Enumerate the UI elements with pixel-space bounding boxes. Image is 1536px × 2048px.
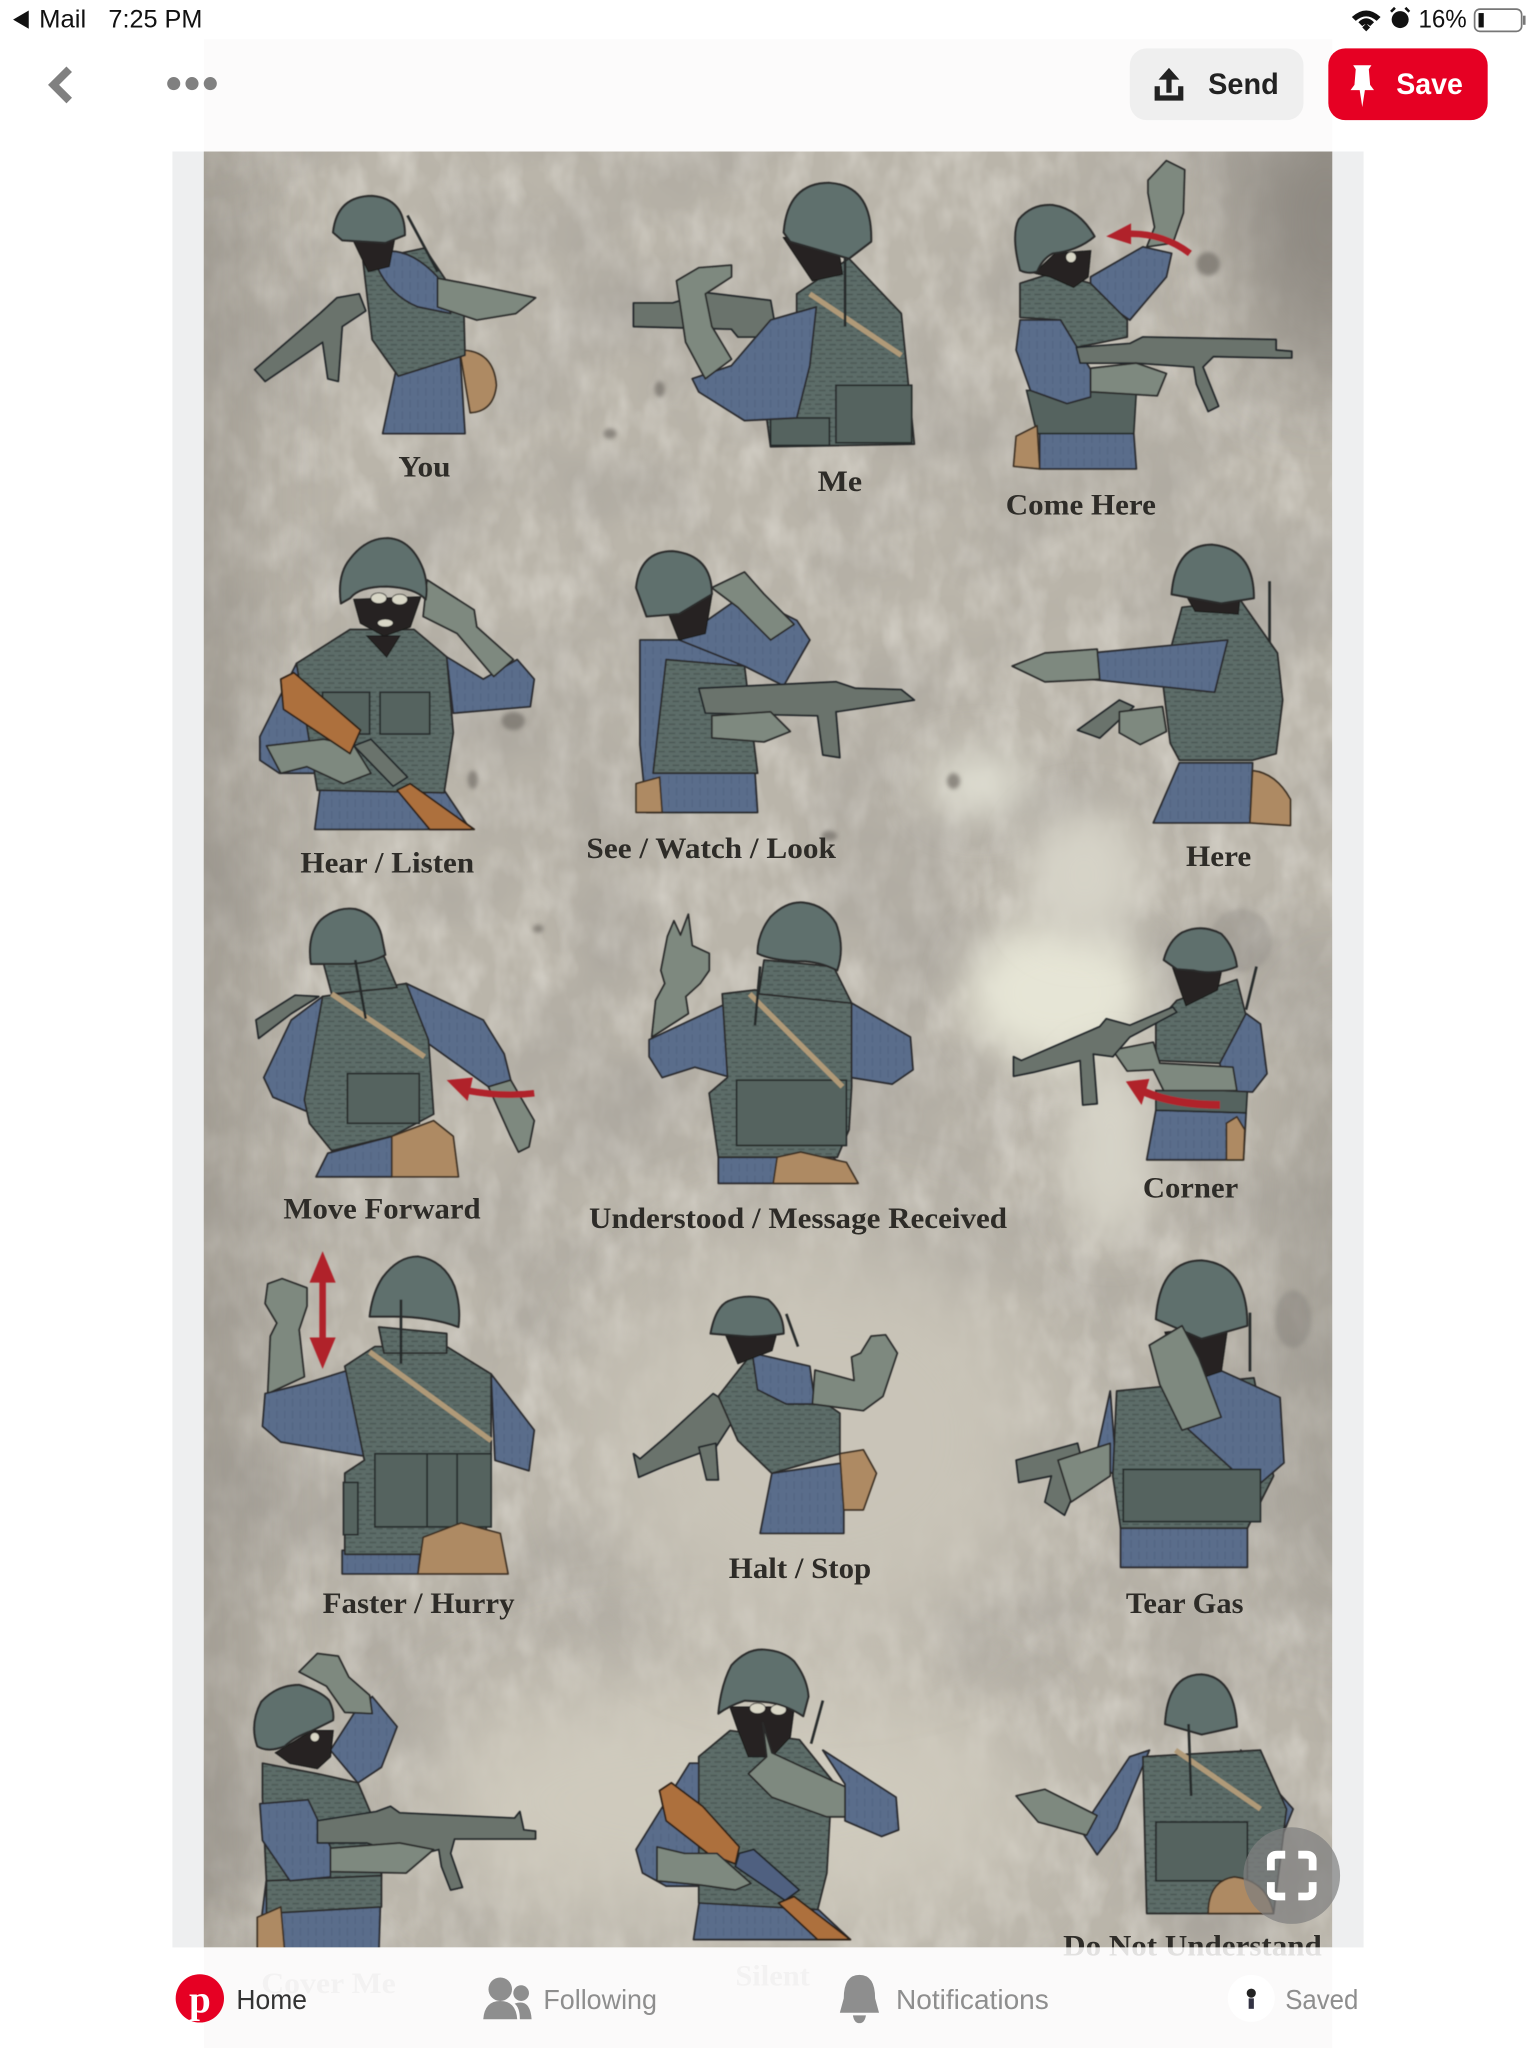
caption: Corner: Corner xyxy=(1143,1172,1238,1205)
caption: Move Forward: Move Forward xyxy=(283,1193,481,1226)
bottom bar overlay tint xyxy=(204,1947,1332,2048)
icon: share xyxy=(1155,68,1183,101)
arrow: red double vertical xyxy=(310,1251,336,1369)
caption: Come Here: Come Here xyxy=(1006,489,1156,522)
figure: Come Here xyxy=(1014,161,1292,469)
arrow: red curved xyxy=(1106,223,1190,253)
icon: back chevron xyxy=(54,69,69,101)
nav item: saved xyxy=(1228,1975,1358,2022)
caption: Halt / Stop: Halt / Stop xyxy=(729,1552,871,1585)
button: save xyxy=(1328,48,1488,120)
figure: Halt / Stop xyxy=(633,1297,897,1533)
status right: wifi alarm battery: 16% xyxy=(1418,6,1467,33)
caption: See / Watch / Look: See / Watch / Look xyxy=(586,832,836,865)
caption: Faster / Hurry: Faster / Hurry xyxy=(323,1587,515,1620)
caption: Tear Gas: Tear Gas xyxy=(1126,1587,1243,1620)
arrow: red move xyxy=(447,1078,534,1101)
concrete background xyxy=(204,152,1332,1948)
nav item: home: Home xyxy=(236,1984,307,2015)
button: save: Save xyxy=(1396,68,1463,101)
ghost caption: Cover Me: Cover Me xyxy=(261,1967,396,2000)
caption: Understood / Message Received: Understood / Message Received xyxy=(589,1202,1007,1235)
figure: Faster / Hurry xyxy=(263,1251,534,1574)
top bar overlay tint xyxy=(204,39,1332,152)
icon: more dots xyxy=(167,77,217,90)
status right: wifi alarm battery xyxy=(1352,6,1526,33)
bottom navigation xyxy=(176,1974,1358,2023)
nav item: saved: Saved xyxy=(1285,1984,1358,2015)
figure: See / Watch / Look xyxy=(636,551,914,812)
icon: pin xyxy=(1351,65,1374,107)
figure: You xyxy=(255,196,536,434)
nav item: notifications xyxy=(840,1975,1049,2023)
caption: Hear / Listen: Hear / Listen xyxy=(300,846,474,879)
decorative specks xyxy=(468,252,1311,1348)
nav item: home xyxy=(176,1974,307,2023)
figure: Hear / Listen xyxy=(260,538,534,829)
figure: Do Not Understand xyxy=(1016,1674,1293,1913)
button: send xyxy=(1130,48,1304,120)
status left: mail and time: Mail xyxy=(39,6,86,33)
figure: Tear Gas xyxy=(1016,1260,1284,1567)
caption: You: You xyxy=(398,451,451,484)
figure: Understood / Message Received xyxy=(649,902,913,1183)
status bar xyxy=(13,6,1526,33)
nav item: following xyxy=(483,1977,657,2019)
ghost caption: Do Not Understand: Do Not Understand xyxy=(1063,1929,1322,1962)
caption: Do Not Understand: Do Not Understand xyxy=(1063,1929,1322,1962)
arrow: red corner xyxy=(1126,1079,1220,1105)
figure: Move Forward xyxy=(256,909,534,1177)
nav item: following: Following xyxy=(543,1984,657,2015)
poster side bands xyxy=(172,152,1364,1947)
figure: Me xyxy=(633,183,914,447)
figure: Here xyxy=(1012,545,1290,825)
caption: Me: Me xyxy=(818,465,862,498)
status left: mail and time: 7:25 PM xyxy=(108,6,202,33)
poster: hand signals xyxy=(204,152,1340,1948)
status left: mail and time xyxy=(13,6,202,33)
figure: Corner xyxy=(1014,928,1267,1160)
ghost caption: Silent: Silent xyxy=(735,1959,810,1992)
nav item: notifications: Notifications xyxy=(896,1984,1049,2015)
button: send: Send xyxy=(1208,68,1279,101)
figure: Cover Me xyxy=(254,1654,536,1953)
figure: Silent xyxy=(636,1650,899,1940)
button: fullscreen lens xyxy=(1243,1827,1340,1924)
nav item: home: p xyxy=(189,1979,211,2022)
caption: Here: Here xyxy=(1186,840,1251,873)
